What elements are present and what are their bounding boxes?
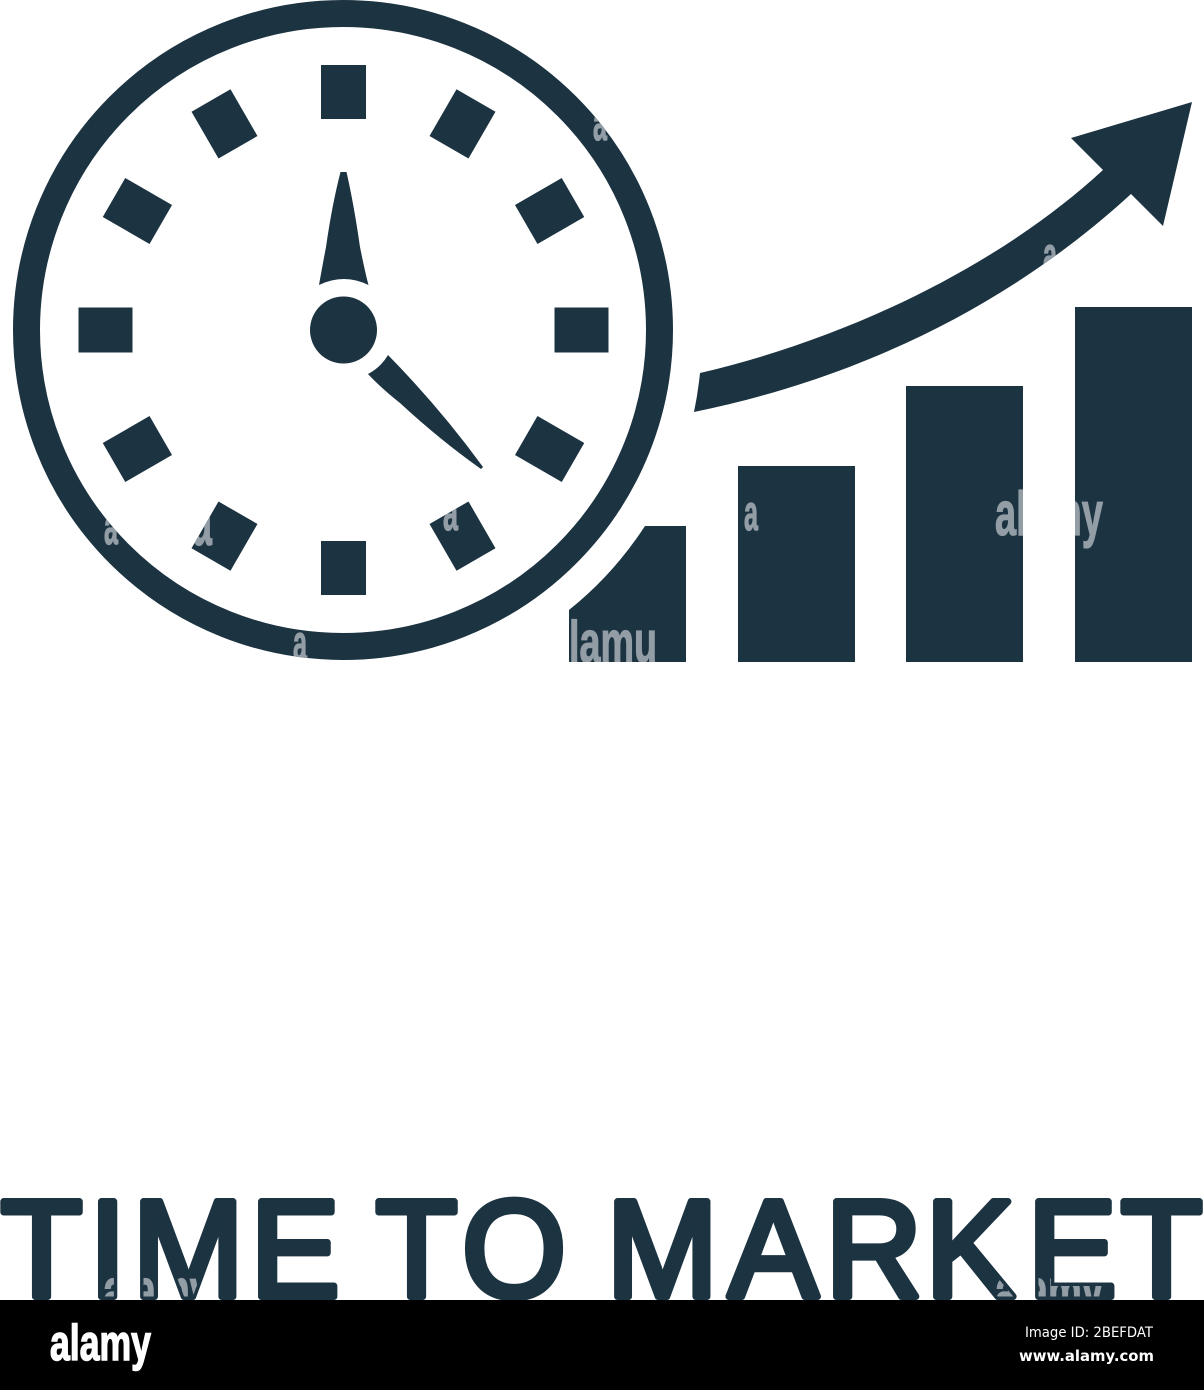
watermark fragments on icon shapes: a — [1043, 227, 1058, 283]
hour tick marks — [78, 65, 608, 595]
footer band — [0, 1300, 1204, 1390]
watermark fragments on icon shapes: a — [443, 485, 459, 541]
watermark fragments on icon shapes: a — [104, 499, 119, 555]
icon: clock — [26, 14, 660, 646]
watermark fragments on icon shapes — [104, 95, 1103, 675]
watermark fragments on icon shapes: alamy — [995, 480, 1103, 549]
hour hand — [319, 172, 368, 285]
icon: rising arrow — [694, 102, 1192, 412]
watermark fragments on icon shapes: a — [192, 477, 213, 561]
website: www.alamy.com — [1019, 1347, 1154, 1365]
title: TIME TO MARKET — [1, 1172, 1203, 1326]
clock ring — [26, 14, 660, 646]
bar 3 — [906, 386, 1023, 662]
watermark fragments on title: alamy — [995, 1257, 1103, 1326]
minute hand — [368, 355, 483, 469]
image id: Image ID: 2BEFDAT — [1025, 1325, 1153, 1341]
watermark fragments on title — [104, 1278, 1102, 1296]
clock hub — [310, 296, 377, 364]
watermark fragments on icon shapes: a — [593, 95, 608, 151]
watermark fragments on title: alamy — [103, 1257, 211, 1326]
watermark fragments on icon shapes: a — [293, 615, 308, 671]
watermark fragments on icon shapes: lamu — [569, 610, 657, 675]
bar 1 — [569, 526, 686, 662]
watermark fragments on icon shapes: a — [744, 485, 759, 541]
alamy logo: alamy — [50, 1315, 151, 1371]
bar 2 — [738, 466, 855, 662]
bar 4 — [1075, 307, 1192, 662]
bar chart — [569, 307, 1192, 662]
